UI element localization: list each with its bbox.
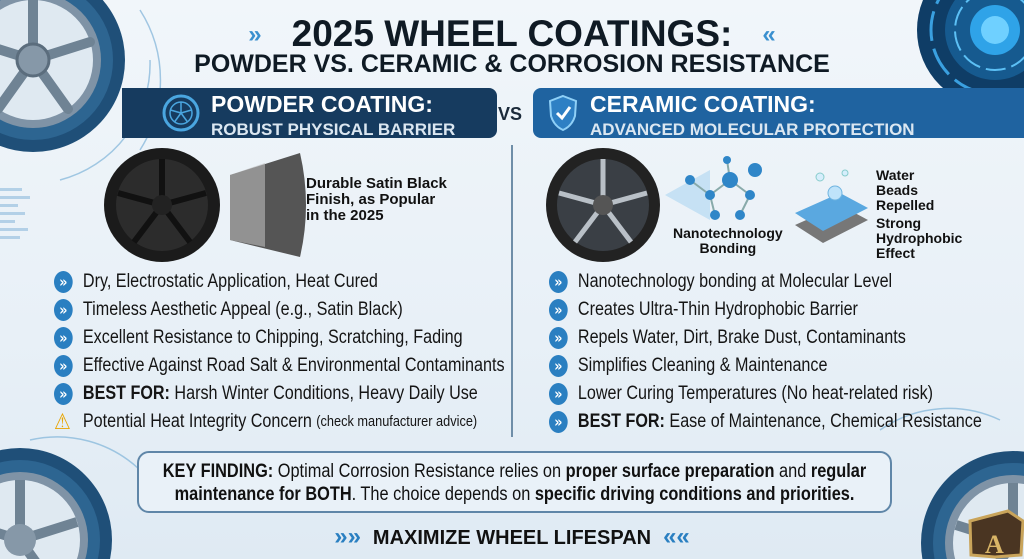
list: ceramic coating bullets: Repels Water, Dirt, Brake Dust, Contaminants [578, 327, 906, 348]
list: powder coating bullets: » [59, 301, 67, 319]
decoration: top-right tech circle [917, 0, 1024, 88]
list: ceramic coating bullets [549, 271, 982, 433]
caption: nanotechnology: Bonding [699, 240, 756, 256]
list: powder coating bullets: Excellent Resistance to Chipping, Scratching, Fading [83, 327, 463, 348]
footer: maximize wheel lifespan: »» MAXIMIZE WHEEL LIFESPAN «« [334, 523, 690, 550]
list: ceramic coating bullets: BEST FOR: [578, 411, 665, 432]
caption: hydrophobic: Hydrophobic [876, 230, 962, 246]
caption: water beads: Water [876, 167, 914, 183]
vs: VS [498, 104, 522, 124]
callout: key finding [137, 451, 892, 513]
list: powder coating bullets: BEST FOR: [83, 383, 170, 404]
callout: key finding: KEY FINDING: Optimal Corrosion Resistance relies on proper surface preparation and regular [163, 461, 866, 482]
icon: water layers [795, 170, 868, 243]
list: ceramic coating bullets: Simplifies Cleaning & Maintenance [578, 355, 827, 376]
divider [511, 145, 513, 437]
list: ceramic coating bullets: Ease of Maintenance, Chemical Resistance [669, 411, 982, 432]
list: powder coating bullets: » [59, 273, 67, 291]
caption: satin black: Durable Satin Black [306, 175, 447, 192]
image: satin black wheel [104, 148, 306, 262]
decoration: top-left wheel [0, 0, 125, 152]
caption: satin black [306, 175, 447, 224]
list: ceramic coating bullets: Creates Ultra-Thin Hydrophobic Barrier [578, 299, 858, 320]
banner: powder coating [122, 88, 497, 138]
subtitle: POWDER VS. CERAMIC & CORROSION RESISTANCE [194, 50, 830, 78]
decoration: bottom-right wheel with logo: A [985, 530, 1004, 559]
decoration: bottom-left wheel [0, 448, 112, 559]
icon: molecule [665, 156, 762, 220]
list: powder coating bullets: Effective Against Road Salt & Environmental Contaminants [83, 355, 505, 376]
list: powder coating bullets: Harsh Winter Conditions, Heavy Daily Use [174, 383, 478, 404]
heading text [211, 91, 455, 139]
caption: water beads [876, 167, 934, 213]
list: powder coating bullets: » [59, 329, 67, 347]
heading text: POWDER COATING: [211, 91, 433, 117]
caption: hydrophobic: Effect [876, 245, 915, 261]
heading text: ROBUST PHYSICAL BARRIER [211, 120, 455, 139]
caption: water beads: Beads [876, 182, 918, 198]
list: ceramic coating bullets: » [554, 301, 562, 319]
list: powder coating bullets: ⚠ [54, 409, 71, 434]
list: ceramic coating bullets: Nanotechnology bonding at Molecular Level [578, 271, 892, 292]
list: powder coating bullets: Potential Heat Integrity Concern [83, 411, 312, 432]
list: powder coating bullets [54, 271, 505, 434]
title: » 2025 WHEEL COATINGS: « [248, 13, 776, 54]
caption: satin black: in the 2025 [306, 207, 384, 224]
list: powder coating bullets: Timeless Aesthetic Appeal (e.g., Satin Black) [83, 299, 403, 320]
callout: key finding: maintenance for BOTH. The choice depends on specific driving conditions and priorities. [175, 484, 854, 505]
caption: satin black: Finish, as Popular [306, 191, 435, 208]
list: powder coating bullets: » [59, 385, 67, 403]
caption: hydrophobic [876, 215, 962, 261]
list: powder coating bullets: » [59, 357, 67, 375]
caption: nanotechnology [673, 225, 783, 256]
icon: wheel [162, 94, 200, 132]
list: ceramic coating bullets: » [554, 357, 562, 375]
heading text [590, 91, 915, 139]
list: ceramic coating bullets: » [554, 413, 562, 431]
image: ceramic wheel [546, 148, 660, 262]
caption: hydrophobic: Strong [876, 215, 921, 231]
list: powder coating bullets: (check manufacturer advice) [316, 413, 477, 430]
caption: water beads: Repelled [876, 197, 934, 213]
list: ceramic coating bullets: » [554, 329, 562, 347]
decoration: bottom-right wheel with logo [921, 451, 1024, 559]
list: ceramic coating bullets: Lower Curing Temperatures (No heat-related risk) [578, 383, 933, 404]
banner: ceramic coating [533, 88, 1024, 138]
heading text: CERAMIC COATING: [590, 91, 816, 117]
caption: nanotechnology: Nanotechnology [673, 225, 783, 241]
list: ceramic coating bullets: » [554, 273, 562, 291]
list: powder coating bullets: Dry, Electrostatic Application, Heat Cured [83, 271, 378, 292]
icon: shield [549, 94, 577, 131]
heading text: ADVANCED MOLECULAR PROTECTION [590, 120, 915, 139]
list: ceramic coating bullets: » [554, 385, 562, 403]
